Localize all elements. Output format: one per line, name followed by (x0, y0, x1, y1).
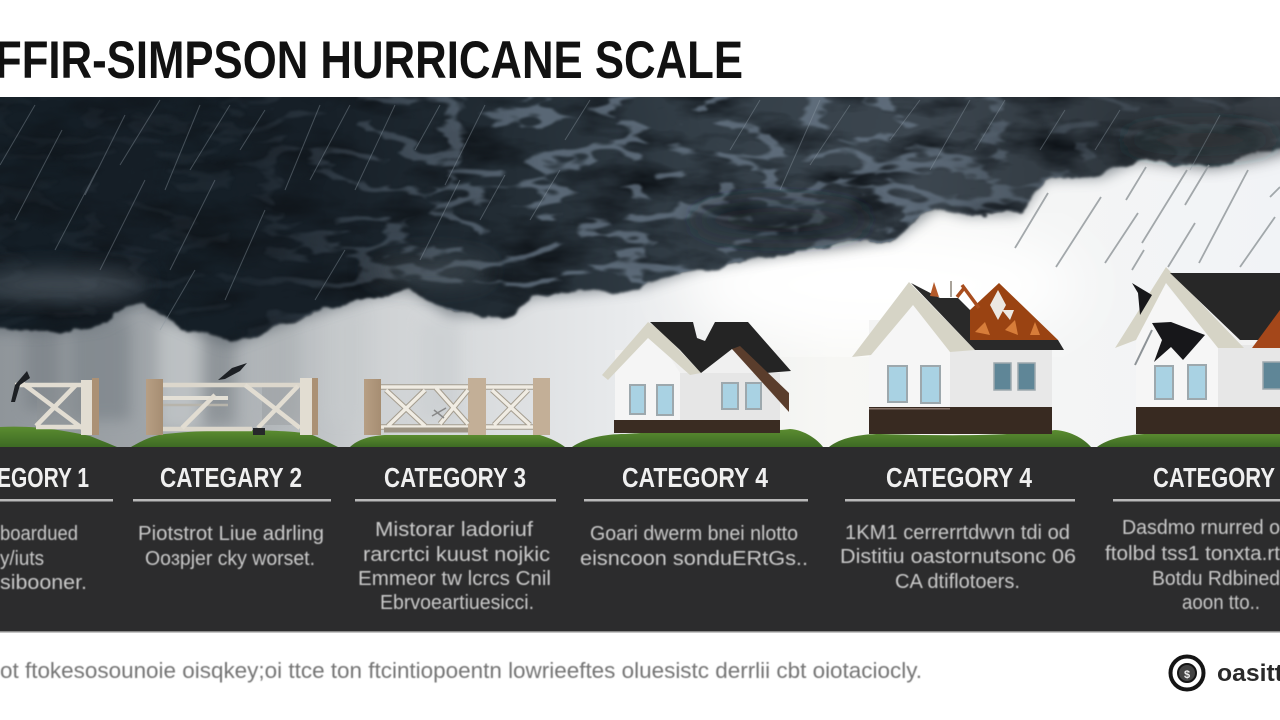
description (138, 523, 324, 570)
house: category 4 roof torn (852, 281, 1064, 434)
windows (630, 383, 761, 415)
fence 3 (category 3) (364, 378, 550, 435)
description: Mistorar ladoriuf (375, 519, 533, 541)
description (1105, 517, 1280, 614)
footer note: ot ftokesosounoie oisqkey;oi ttce ton ftcintiopoentn lowrieeftes oluesistc derrlii cbt oiotaciocly. (0, 658, 922, 683)
description: Dasdmo rnurred o (1122, 517, 1280, 539)
windows (1155, 365, 1206, 399)
description: CA dtiflotoers. (895, 571, 1020, 593)
house: category 4 (602, 322, 791, 433)
fence 1 (category 1) (11, 371, 99, 435)
description: 1KM1 cerrerrtdwvn tdi od (845, 522, 1070, 544)
icon: logo badge: $ (1184, 669, 1190, 681)
icon: wind-blown debris (1152, 322, 1205, 362)
heading: CATEGARY 2 (160, 462, 302, 493)
icon: flying debris (11, 371, 30, 402)
description: aoon tto.. (1182, 592, 1260, 614)
heading: CATEGORY 4 (622, 462, 768, 493)
description: y/iuts (0, 548, 44, 570)
panel: category strip (0, 447, 1280, 632)
description: ftolbd tss1 tonxta.rt (1105, 543, 1280, 565)
cloud veins (156, 97, 1280, 336)
category 4 column (580, 462, 808, 570)
bright horizon glow (695, 246, 1034, 328)
rain streaks on bright sky (1015, 165, 1280, 270)
ground island 5 (829, 430, 1091, 447)
rain curtain (25, 310, 460, 430)
category 2 column (133, 462, 331, 570)
exposed roof rafters (930, 281, 1058, 340)
storm cloud mass (0, 90, 1280, 345)
house: category 5 (1115, 267, 1280, 434)
description: sibooner. (0, 572, 87, 594)
cloud shading (0, 124, 1280, 297)
description: Ooɜpjer cky worset. (145, 548, 315, 570)
description: Piotstrot Liue adrling (138, 523, 324, 545)
category 1 column (0, 462, 113, 594)
description (0, 523, 87, 594)
description: eisncoon sonduERtGs.. (580, 548, 808, 570)
description: Distitiu oastornutsonc 06 (840, 546, 1076, 568)
heading: CATEGORY 3 (384, 462, 526, 493)
logo wordmark: oasitt (1217, 660, 1280, 687)
fence 2 (category 2) (146, 363, 318, 435)
icon: roof fragment (1132, 283, 1152, 315)
title: FFIR-SIMPSON HURRICANE SCALE (0, 31, 743, 90)
second category 4 column (840, 462, 1076, 593)
description: Goari dwerm bnei nlotto (590, 523, 798, 545)
description: Emmeor tw lcrcs Cnil (358, 568, 551, 590)
heading: CATEGORY 4 (886, 462, 1032, 493)
description (580, 523, 808, 570)
category 5 column (1105, 462, 1280, 614)
cloud edge haze (0, 147, 1280, 349)
description (358, 519, 551, 614)
ground island 2 (131, 430, 338, 447)
category 3 column (355, 462, 556, 614)
rain streaks on cloud (0, 100, 1220, 330)
ground island 4 (572, 429, 823, 447)
description: Ebrvoeartiuesicci. (380, 592, 534, 614)
icon: flying debris (218, 363, 247, 380)
description (840, 522, 1076, 593)
windows (888, 366, 940, 403)
heading: EGORY 1 (0, 462, 89, 493)
storm sky scene (0, 90, 1280, 447)
description: boardued (0, 523, 78, 545)
ground island 3 (350, 435, 565, 447)
ground island 1 (0, 427, 117, 447)
logo (1170, 656, 1280, 690)
ground island 6 (1097, 433, 1280, 447)
description: rarcrtci kuust nojkic (363, 544, 550, 566)
